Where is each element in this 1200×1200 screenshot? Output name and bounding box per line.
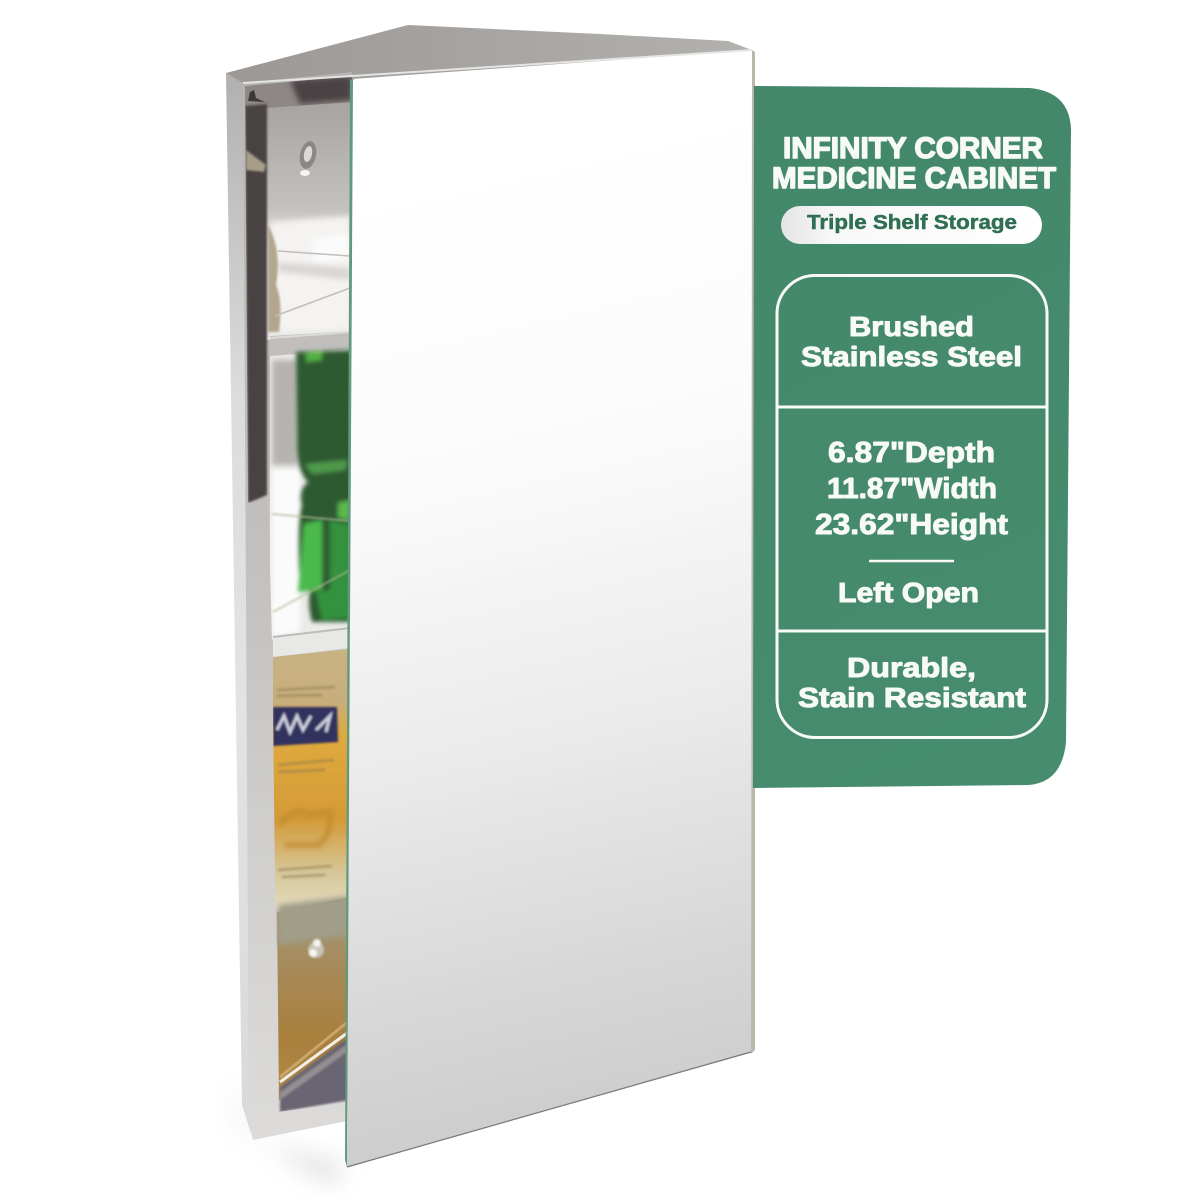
row: dimensions: 6.87"Depth [828,437,995,469]
top face of cabinet [226,25,752,84]
row: dimensions: 23.62"Height [815,509,1008,541]
wire lines [275,251,350,316]
reflected object [268,225,280,332]
cabinet: medicine cabinet product with open mirror door [226,25,755,1167]
row: material: Brushed [849,311,974,342]
shelf peg lower [308,939,324,958]
lotion bottle [273,649,350,910]
lower compartment [277,897,350,1100]
lotion label: navy band [273,707,338,746]
hinge [248,90,265,102]
mirror bottom edge [347,1052,751,1167]
back panel upper shelf [266,102,352,340]
dark bottom recess [280,1036,350,1112]
mirror top edge [243,50,752,83]
mirror door [347,50,752,1167]
shelf two [273,632,350,657]
panel: green specification panel [753,86,1071,788]
shelf one [270,332,349,340]
title: INFINITY CORNER [783,132,1043,165]
row: material [801,311,1022,372]
row: durability: Durable, [847,652,976,683]
row: durability [798,652,1026,713]
row: dimensions: 11.87"Width [827,473,997,505]
mirror door glass edge [345,79,354,1167]
reflection highlights [270,216,350,332]
title: MEDICINE CABINET [772,162,1056,195]
subtitle pill [781,206,1042,244]
mirror right edge [751,50,755,1054]
shelf peg upper [297,140,319,176]
left outer frame [226,73,253,1140]
row: durability: Stain Resistant [798,682,1026,713]
lotion swirl logo [280,812,330,845]
features table [777,276,1047,738]
panel background [753,86,1071,788]
cabinet interior [244,76,354,1112]
dark left strip [245,104,267,503]
subtitle pill: Triple Shelf Storage [807,211,1017,234]
row: dimensions [815,437,1008,541]
back panel middle shelf [270,350,352,640]
cabinet floor shadow [232,1075,346,1185]
title [772,132,1056,195]
row: material: Stainless Steel [801,341,1022,372]
row: door orientation: Left Open [838,577,979,608]
glass shelf edges [280,1020,350,1077]
front frame strip [243,72,352,1140]
green bottle [296,350,352,622]
lotion fine print [277,687,335,877]
top recess [244,76,354,108]
